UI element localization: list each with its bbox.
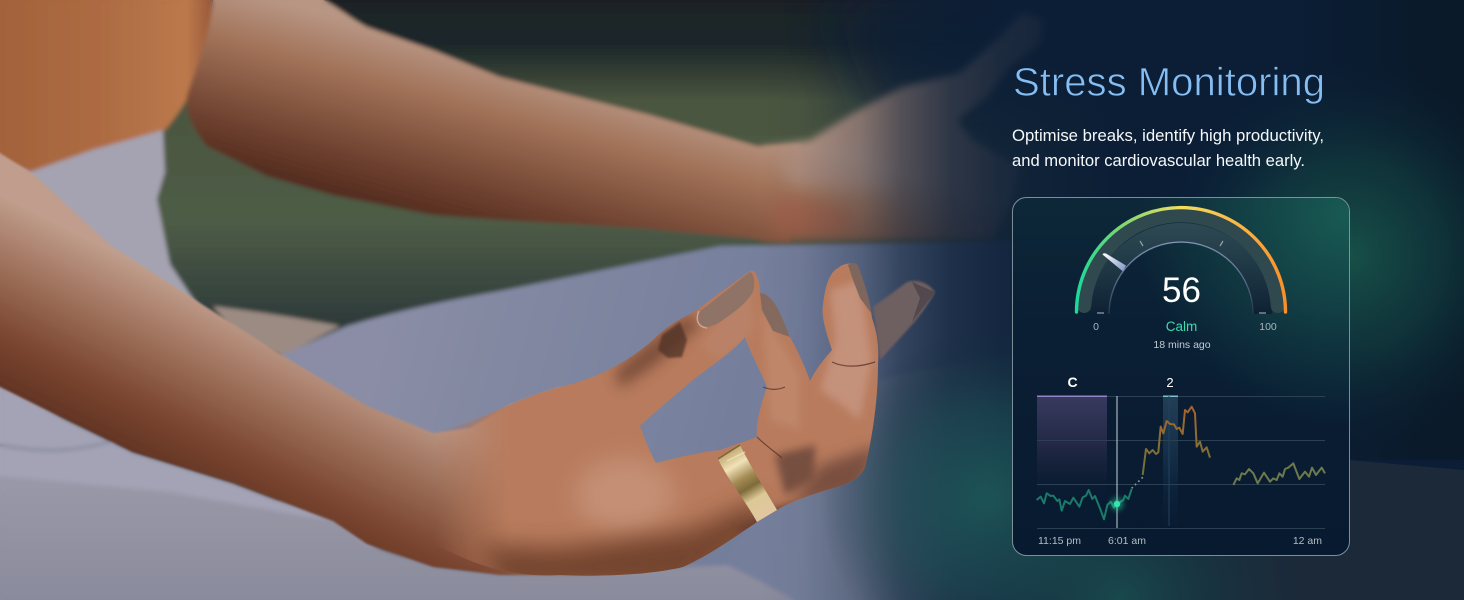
olive later line — [1233, 463, 1325, 485]
ring band — [718, 445, 777, 522]
shading: palm lower — [478, 494, 760, 576]
gauge min label: 0 — [1093, 321, 1099, 333]
ring reflection — [727, 452, 745, 461]
shading: middle finger knuckle — [775, 445, 815, 495]
photo: back hand — [760, 13, 1043, 240]
top dark vignette — [830, 0, 1130, 130]
gauge max label: 100 — [1259, 321, 1277, 333]
pants lower fold — [700, 360, 1120, 600]
chart blue highlight band — [1163, 396, 1178, 526]
x label end: 12 am — [1293, 535, 1322, 547]
x label start: 11:15 pm — [1038, 535, 1081, 547]
glow: teal right — [1160, 65, 1464, 445]
pants upper leg — [275, 240, 1100, 600]
gauge — [1076, 208, 1286, 351]
ring edge — [718, 445, 740, 459]
hand: knuckle wrinkles — [658, 322, 687, 358]
photo: back hand pale knuckles — [780, 140, 900, 190]
photo: pinky nail tip — [912, 282, 935, 322]
shading: back finger light — [820, 280, 872, 420]
chart label 2: 2 — [1166, 375, 1174, 390]
subtitle line 2: and monitor cardiovascular health early. — [1012, 152, 1305, 170]
hand: middle nail — [760, 293, 790, 337]
chart purple top line — [1037, 396, 1107, 397]
x label current: 6:01 am — [1108, 535, 1146, 547]
chart highlight centre line — [1168, 396, 1170, 526]
dotted projection — [1132, 477, 1143, 488]
hand: shading — [480, 280, 880, 590]
gauge inner band — [1100, 233, 1262, 314]
stress line chart — [1037, 374, 1325, 547]
skin behind arm — [213, 306, 340, 356]
green line — [1037, 489, 1132, 519]
panel: stress card — [1012, 198, 1350, 556]
chart blue top line — [1163, 396, 1178, 397]
gold ring — [718, 445, 777, 522]
right sofa shade — [1000, 430, 1464, 600]
photo: back hand reddish wrist — [772, 198, 850, 236]
shading: palm highlight — [575, 457, 675, 533]
chart gridlines — [1037, 396, 1325, 528]
hand: thumb cuticle — [697, 311, 707, 328]
gradient overlay: navy fade — [760, 0, 1120, 600]
chart traces — [1037, 407, 1325, 519]
photo: hand — [443, 263, 878, 576]
chart current-time line — [1116, 396, 1118, 528]
gauge time: 18 mins ago — [1153, 339, 1211, 351]
shading: thumb top dark side — [615, 314, 700, 388]
glow: teal bottom left of card — [820, 330, 1160, 600]
card background — [1012, 198, 1350, 556]
title: Stress Monitoring — [1013, 60, 1325, 104]
chart purple session block — [1037, 396, 1107, 496]
gauge value: 56 — [1162, 271, 1201, 310]
gauge tick marks — [1097, 241, 1266, 313]
grey top — [0, 130, 220, 340]
chart icon label C: C — [1067, 374, 1078, 390]
subtitle — [1012, 127, 1324, 170]
shading: middle finger light — [764, 324, 799, 426]
shading: ring finger dark under ring — [740, 499, 796, 532]
chart marker glow — [1111, 498, 1123, 510]
chart marker dot — [1114, 501, 1120, 507]
card teal tint — [1013, 198, 1349, 555]
hand: thumb nail — [697, 272, 754, 327]
gauge status: Calm — [1166, 319, 1197, 334]
upper arm — [187, 0, 800, 242]
gauge needle — [1102, 253, 1126, 272]
right dark edge — [1280, 0, 1464, 460]
lower shirt — [0, 380, 400, 560]
hand: base with finger hole — [400, 264, 878, 576]
shirt folds — [0, 435, 150, 498]
blanket — [0, 476, 795, 600]
photo: pinky finger — [873, 281, 935, 360]
gold rising line — [1143, 407, 1210, 475]
gauge inner line — [1109, 242, 1253, 314]
hand: back finger nail — [848, 263, 871, 313]
shading: back finger lower — [790, 445, 880, 505]
hand: creases — [757, 362, 875, 458]
gauge coloured arc — [1076, 208, 1286, 312]
glow: teal under card — [940, 420, 1300, 600]
torso — [0, 0, 212, 172]
shading: thumb tip light — [706, 300, 752, 354]
forearm shape — [0, 146, 600, 575]
gauge slate band — [1084, 215, 1278, 306]
photo: forearm — [0, 146, 600, 575]
navy right panel — [1119, 0, 1464, 600]
subtitle line 1: Optimise breaks, identify high productivity, — [1012, 127, 1324, 145]
